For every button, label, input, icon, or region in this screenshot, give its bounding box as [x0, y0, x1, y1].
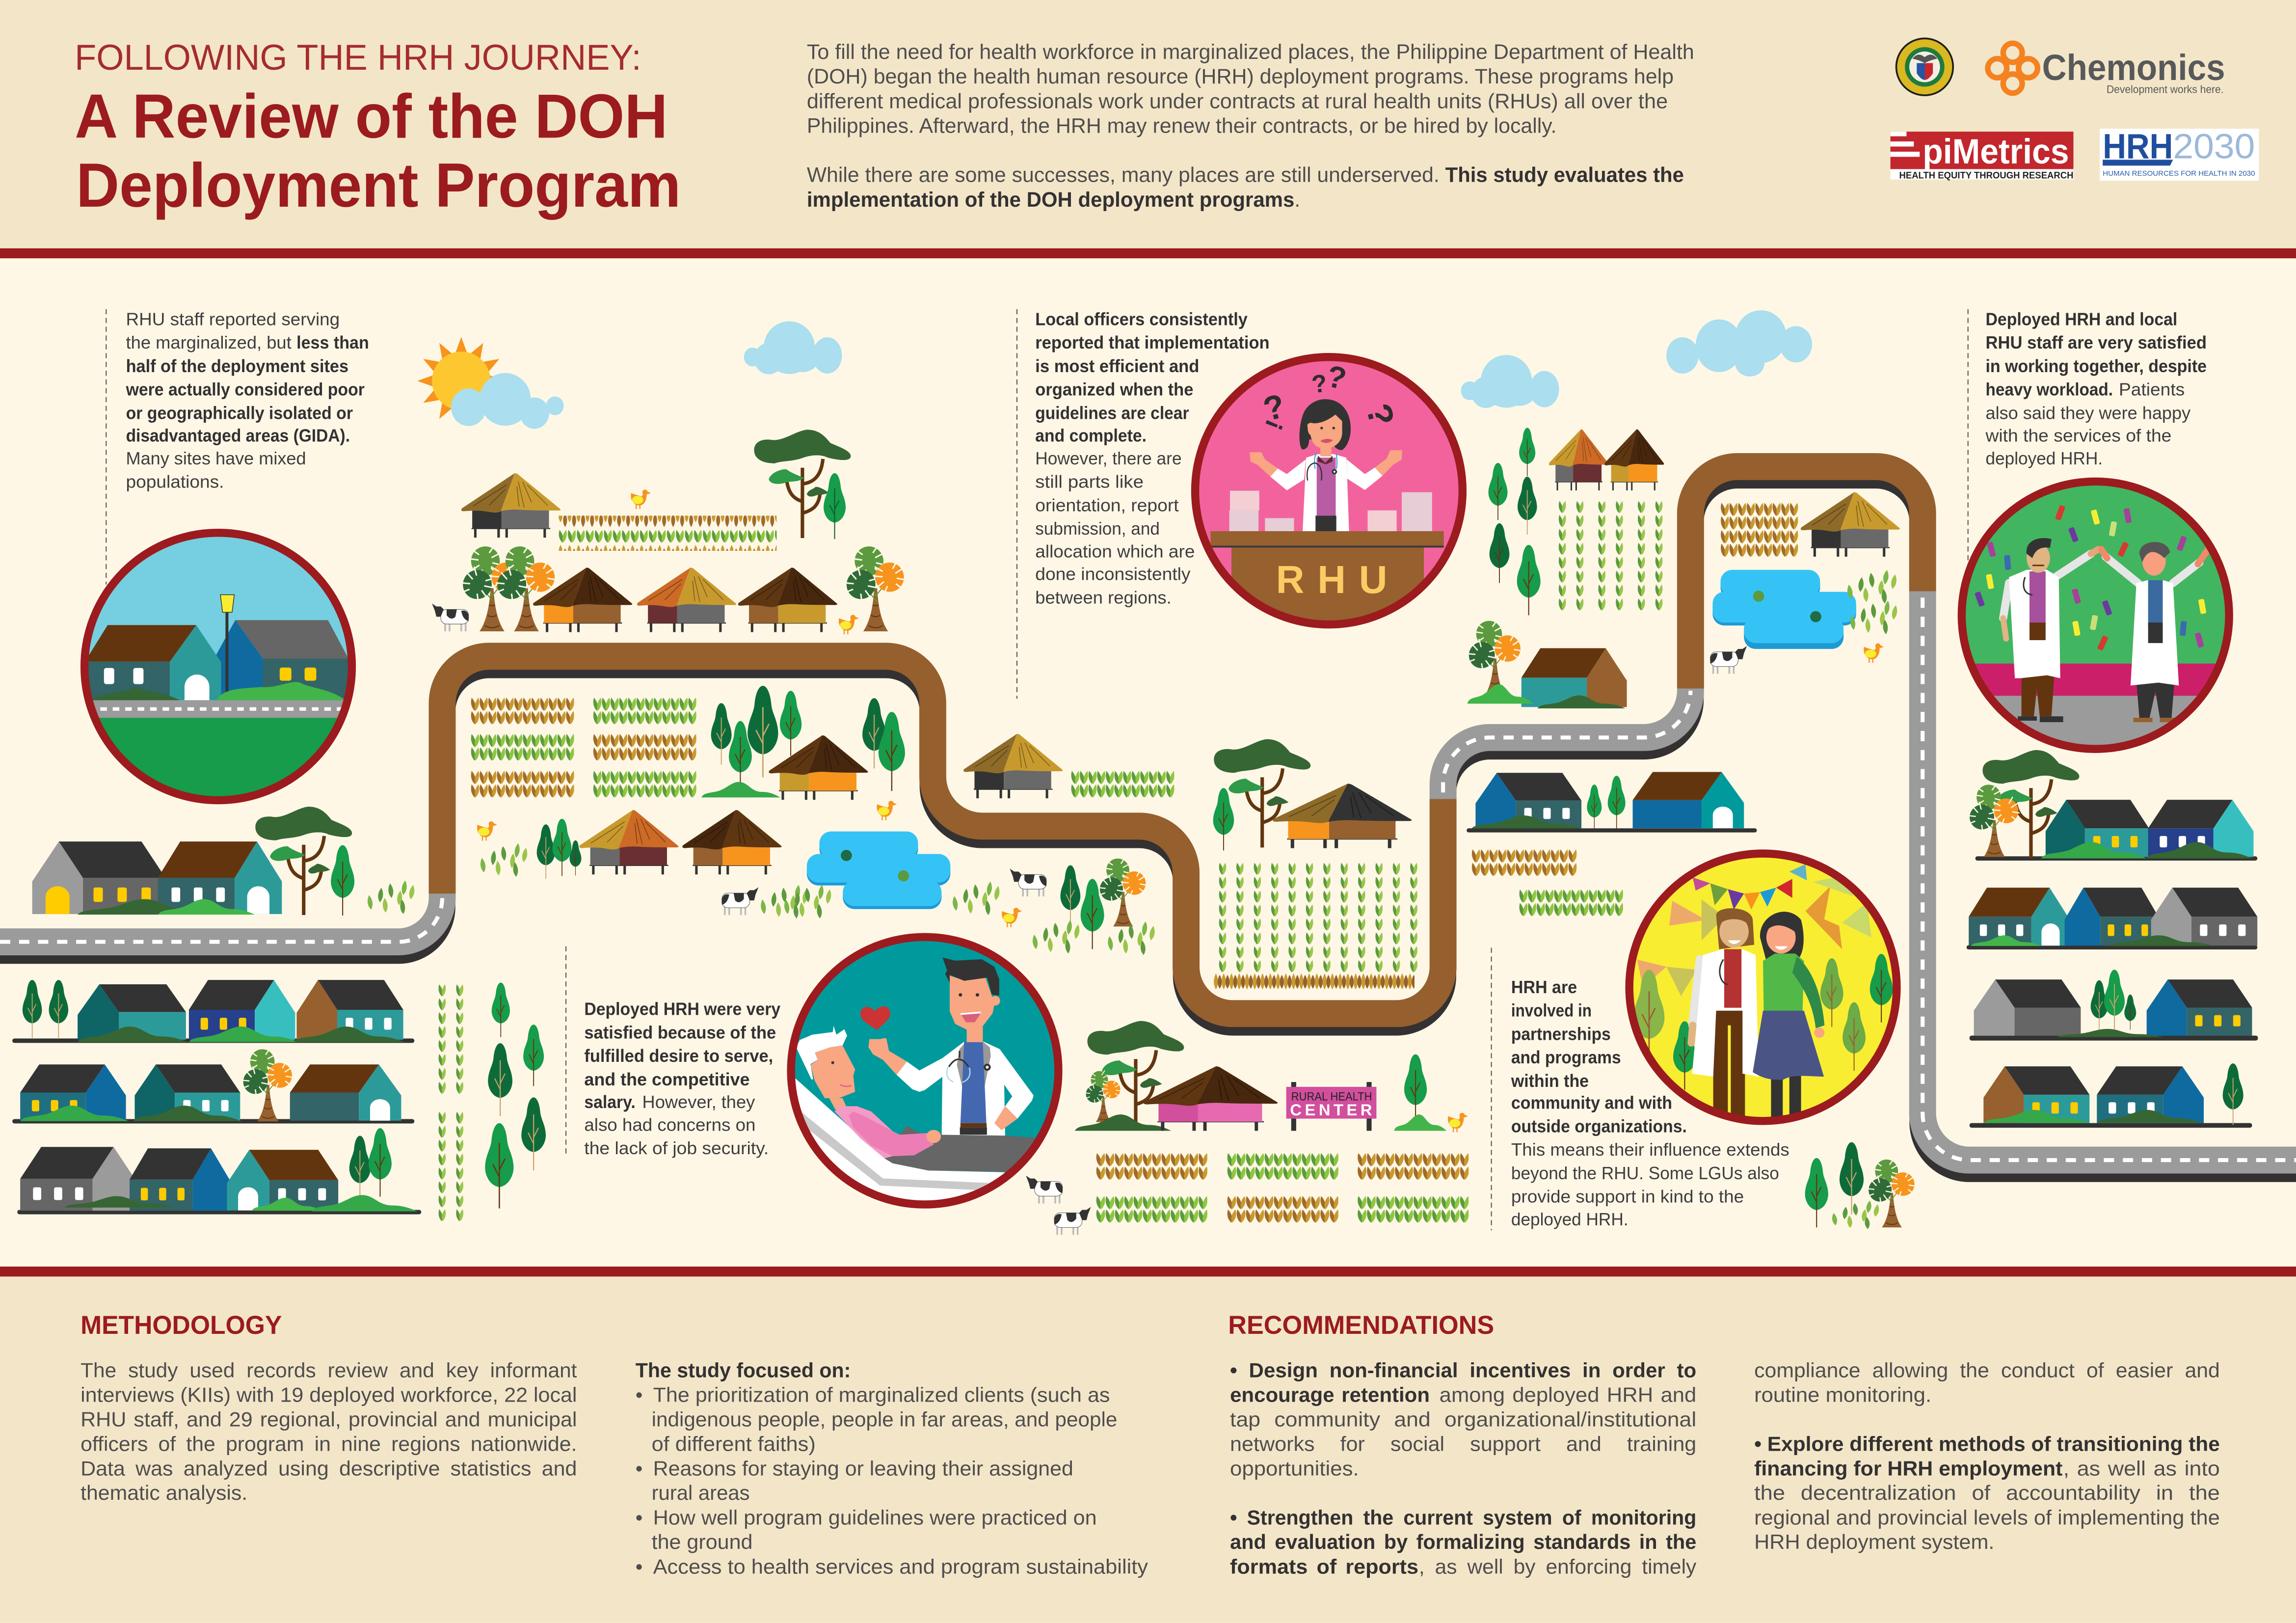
- paper stacks: [1229, 491, 1432, 531]
- introduction text: While there are some successes, many places are still underserved.: [807, 163, 1440, 187]
- rural health center scene: [1026, 1021, 1468, 1235]
- text block: recommendations column two: the decentralization of accountability in the: [1754, 1481, 2220, 1504]
- panel: deployed HRH and local staff text: deployed HRH.: [1986, 449, 2103, 468]
- introduction text: This study evaluates the: [1445, 163, 1684, 187]
- field: crops inside the first road bend: [471, 686, 905, 919]
- introduction text: To fill the need for health workforce in marginalized places, the Philippine Department of Health: [807, 40, 1694, 64]
- text block: study focus list: How well program guidelines were practiced on: [653, 1506, 1097, 1529]
- sun and cloud: [417, 337, 564, 429]
- panel: deployed HRH and local staff text: RHU staff are very satisfied: [1986, 333, 2207, 352]
- panel: HRH partnerships text: involved in: [1511, 1001, 1592, 1021]
- introduction text: different medical professionals work under contracts at rural health units (RHUs) all over the: [807, 89, 1668, 113]
- text block: methodology description: [80, 1358, 577, 1504]
- panel: deployed HRH satisfaction text: [566, 946, 780, 1158]
- logo: HRH2030: [2100, 127, 2259, 181]
- text block: methodology description: officers of the program in nine regions nationwide.: [80, 1433, 577, 1456]
- village: right side house rows: [1964, 750, 2258, 1128]
- introduction text: (DOH) began the health human resource (HRH) deployment programs. These programs help: [807, 65, 1674, 88]
- panel: HRH partnerships text: beyond the RHU. Some LGUs also: [1511, 1163, 1779, 1183]
- panel: RHU staff text: RHU staff reported serving: [126, 310, 340, 329]
- text block: recommendations column two: HRH deployment system.: [1754, 1530, 1994, 1553]
- text block: methodology description: The study used records review and key informant: [80, 1358, 577, 1381]
- cloud: [1666, 310, 1812, 377]
- question marks: ?: [1310, 369, 1329, 399]
- heading: recommendations: RECOMMENDATIONS: [1228, 1311, 1494, 1340]
- patient: [796, 1026, 941, 1158]
- header band: [0, 0, 2296, 249]
- text block: study focus list: The study focused on:: [636, 1358, 851, 1381]
- RHU desk label: R H U: [1276, 558, 1387, 601]
- introduction text: Philippines. Afterward, the HRH may renew their contracts, or be hired by locally.: [807, 114, 1556, 137]
- panel: deployed HRH satisfaction text: fulfilled desire to serve,: [584, 1046, 773, 1066]
- sign: rural health center: [1286, 1082, 1376, 1131]
- icon: heart: [860, 1006, 890, 1030]
- panel: RHU staff text: less than: [296, 333, 369, 352]
- panel: local officers text: guidelines are clear: [1035, 403, 1189, 423]
- big field in the road's lower bend: [1213, 739, 1422, 990]
- logo: Chemonics: [1988, 43, 2225, 96]
- circle: houses and street lamp: [80, 533, 359, 806]
- panel: local officers text: organized when the: [1035, 380, 1193, 400]
- panel: HRH partnerships text: within the: [1511, 1071, 1589, 1091]
- panel: local officers text: is most efficient and: [1035, 356, 1199, 376]
- text block: recommendations column two: regional and provincial levels of implementing the: [1754, 1506, 2220, 1529]
- doctor left: [2003, 538, 2098, 722]
- panel: HRH partnerships text: outside organizations.: [1511, 1116, 1687, 1136]
- panel: HRH partnerships text: [1492, 947, 1789, 1230]
- text block: study focus list: the ground: [652, 1530, 752, 1553]
- text block: study focus list: •: [636, 1457, 642, 1480]
- logo: EpiMetrics: [1891, 132, 2074, 181]
- panel: deployed HRH and local staff text: heavy workload.: [1986, 380, 2113, 400]
- village: lower-left house rows: [12, 980, 421, 1214]
- panel: RHU staff text: the marginalized, but: [126, 333, 292, 352]
- panel: local officers text: [1017, 309, 1270, 699]
- panel: RHU staff text: or geographically isolated or: [126, 403, 353, 423]
- health worker: [1691, 908, 1759, 1119]
- panel: deployed HRH and local staff text: with the services of the: [1985, 426, 2171, 446]
- panel: local officers text: orientation, report: [1035, 495, 1179, 515]
- panel: RHU staff text: [106, 309, 369, 585]
- logo: HRH2030: HUMAN RESOURCES FOR HEALTH IN 2030: [2103, 170, 2255, 178]
- text block: recommendations column one: and evaluation by formalizing standards in the: [1230, 1530, 1696, 1553]
- village: inside the top road loop: [1710, 492, 1900, 674]
- desk: [1210, 531, 1444, 621]
- village: upper-left huts, field and palms: [432, 430, 908, 634]
- logo: HRH2030: HRH: [2103, 127, 2173, 166]
- road: journey path: [0, 466, 2296, 1169]
- text block: recommendations column two: • Explore different methods of transitioning the: [1754, 1433, 2220, 1456]
- panel: RHU staff text: were actually considered poor: [126, 380, 365, 400]
- text block: study focus list: [636, 1358, 1148, 1578]
- pond: [1712, 570, 1856, 649]
- panel: HRH partnerships text: community and with: [1511, 1093, 1672, 1113]
- circle: two doctors celebrating with confetti: [1955, 482, 2233, 755]
- text block: recommendations column two: routine monitoring.: [1754, 1383, 1931, 1406]
- bunting: [1637, 864, 1871, 996]
- panel: HRH partnerships text: and programs: [1511, 1048, 1621, 1067]
- bed: [783, 1078, 1047, 1216]
- panel: deployed HRH satisfaction text: Deployed HRH were very: [584, 1000, 780, 1019]
- cloud: [1461, 355, 1559, 408]
- heading: methodology: METHODOLOGY: [80, 1311, 282, 1340]
- text block: study focus list: rural areas: [652, 1481, 750, 1504]
- community member: [1753, 912, 1824, 1121]
- text block: study focus list: •: [636, 1506, 642, 1529]
- village: middle huts and trees along the road: [952, 734, 1174, 955]
- title: FOLLOWING THE HRH JOURNEY:: [75, 38, 641, 78]
- text block: recommendations column one: encourage retention: [1230, 1383, 1430, 1406]
- panel: HRH partnerships text: deployed HRH.: [1511, 1210, 1629, 1229]
- logo: EpiMetrics: piMetrics: [1922, 132, 2069, 171]
- cloud: [744, 321, 842, 374]
- panel: local officers text: between regions.: [1035, 588, 1172, 607]
- footer rule: [0, 1267, 2296, 1276]
- panel: deployed HRH and local staff text: in working together, despite: [1986, 356, 2207, 376]
- panel: local officers text: Local officers consistently: [1035, 310, 1248, 329]
- question marks: ?: [1358, 400, 1402, 430]
- footer band: [0, 1276, 2296, 1623]
- sign: rural health center: RURAL HEALTH: [1291, 1090, 1372, 1103]
- question marks: !: [1259, 416, 1289, 434]
- text block: study focus list: Reasons for staying or leaving their assigned: [653, 1457, 1073, 1480]
- text block: study focus list: •: [636, 1555, 642, 1578]
- panel: deployed HRH satisfaction text: the lack of job security.: [584, 1138, 769, 1158]
- panel: deployed HRH satisfaction text: However, they: [642, 1092, 755, 1112]
- logo: EpiMetrics: HEALTH EQUITY THROUGH RESEARCH: [1899, 170, 2074, 181]
- panel: deployed HRH and local staff text: also said they were happy: [1986, 403, 2190, 423]
- panel: local officers text: still parts like: [1035, 472, 1144, 492]
- panel: HRH partnerships text: HRH are: [1511, 977, 1577, 997]
- panel: RHU staff text: Many sites have mixed: [126, 449, 306, 468]
- header rule: [0, 248, 2296, 258]
- confetti: [1975, 505, 2207, 651]
- circle: health worker and community member: [1629, 854, 1896, 1121]
- sign: rural health center: CENTER: [1290, 1101, 1372, 1119]
- text block: study focus list: Access to health services and program sustainability: [653, 1555, 1148, 1578]
- doctor: [868, 957, 1034, 1136]
- panel: local officers text: allocation which are: [1035, 541, 1195, 561]
- logo: Chemonics: Chemonics: [2042, 47, 2225, 88]
- panel: local officers text: However, there are: [1035, 449, 1182, 468]
- pond: [807, 832, 950, 909]
- officer: [1250, 399, 1402, 531]
- introduction text: [807, 40, 1694, 212]
- village: upper right-center huts and field: [1463, 428, 1668, 708]
- panel: deployed HRH and local staff text: Patients: [2119, 380, 2185, 400]
- field: vertical sprouts and trees: [433, 982, 546, 1221]
- panel: local officers text: and complete.: [1035, 426, 1147, 446]
- text block: recommendations column two: , as well as into: [2063, 1457, 2220, 1480]
- text block: methodology description: interviews (KIIs) with 19 deployed workforce, 22 local: [80, 1383, 577, 1406]
- panel: deployed HRH satisfaction text: also had concerns on: [584, 1115, 755, 1135]
- text block: recommendations column one: networks for social support and training: [1230, 1433, 1696, 1456]
- question marks: [1259, 359, 1402, 434]
- panel: HRH partnerships text: provide support in kind to the: [1511, 1187, 1744, 1207]
- text block: recommendations column two: financing for HRH employment: [1754, 1457, 2063, 1480]
- panel: RHU staff text: populations.: [126, 472, 224, 492]
- panel: deployed HRH satisfaction text: satisfied because of the: [584, 1023, 776, 1042]
- text block: recommendations column one: [1230, 1358, 1696, 1578]
- panel: RHU staff text: half of the deployment sites: [126, 356, 348, 376]
- village: lower-left houses by the road: [32, 807, 416, 916]
- logo: HRH2030: 2030: [2173, 127, 2255, 166]
- panel: deployed HRH satisfaction text: salary.: [584, 1092, 636, 1112]
- panel: local officers text: submission, and: [1035, 519, 1160, 539]
- text block: study focus list: of different faiths): [652, 1433, 816, 1456]
- circle: doctor with elderly patient: [783, 937, 1058, 1216]
- panel: deployed HRH and local staff text: [1968, 309, 2207, 589]
- text block: methodology description: RHU staff, and 29 regional, provincial and municipal: [80, 1407, 577, 1431]
- text block: recommendations column one: tap community and organizational/institutional: [1230, 1407, 1696, 1431]
- question marks: ?: [1259, 386, 1289, 428]
- text block: recommendations column one: • Design non-financial incentives in order to: [1230, 1358, 1696, 1381]
- title: A Review of the DOH: [75, 81, 667, 151]
- text block: recommendations column one: formats of reports: [1230, 1555, 1418, 1578]
- panel: HRH partnerships text: This means their influence extends: [1511, 1140, 1789, 1160]
- panel: deployed HRH satisfaction text: and the competitive: [584, 1070, 750, 1089]
- panel: RHU staff text: disadvantaged areas (GIDA).: [126, 426, 350, 446]
- panel: deployed HRH and local staff text: Deployed HRH and local: [1986, 310, 2177, 329]
- introduction text: implementation of the DOH deployment programs: [807, 188, 1294, 212]
- village: road-side houses and crops right of center: [1467, 772, 1757, 917]
- doctor right: [2101, 542, 2208, 722]
- text block: recommendations column two: compliance allowing the conduct of easier and: [1754, 1358, 2220, 1381]
- panel: local officers text: done inconsistently: [1035, 565, 1191, 584]
- panel: HRH partnerships text: partnerships: [1511, 1024, 1611, 1044]
- text block: methodology description: Data was analyzed using descriptive statistics and: [80, 1457, 577, 1480]
- question marks: ?: [1324, 359, 1349, 396]
- text block: recommendations column one: opportunities.: [1230, 1457, 1359, 1480]
- logo: Chemonics: Development works here.: [2107, 83, 2224, 96]
- title: Deployment Program: [76, 150, 681, 220]
- text block: study focus list: •: [636, 1383, 642, 1406]
- text block: recommendations column one: , as well by enforcing timely: [1419, 1555, 1696, 1578]
- text block: study focus list: indigenous people, people in far areas, and people: [652, 1407, 1117, 1431]
- title: [75, 38, 681, 220]
- panel: local officers text: reported that implementation: [1035, 333, 1270, 352]
- logo: Department of Health seal: [1896, 38, 1954, 96]
- circle: confused officer at RHU desk: [1195, 357, 1463, 634]
- text block: methodology description: thematic analysis.: [80, 1481, 247, 1504]
- text block: recommendations column two: [1754, 1358, 2220, 1553]
- text block: recommendations column one: among deployed HRH and: [1440, 1383, 1696, 1406]
- text block: study focus list: The prioritization of marginalized clients (such as: [653, 1383, 1110, 1406]
- introduction text: .: [1294, 188, 1300, 212]
- text block: recommendations column one: • Strengthen the current system of monitoring: [1230, 1506, 1696, 1529]
- trees below the yellow circle: [1805, 1142, 1918, 1229]
